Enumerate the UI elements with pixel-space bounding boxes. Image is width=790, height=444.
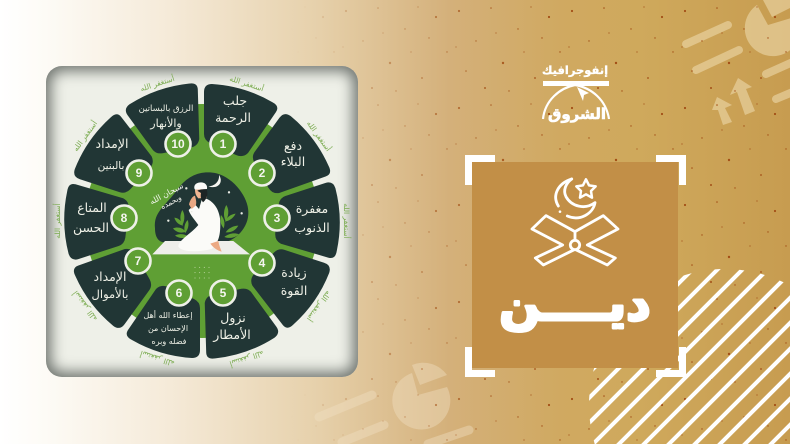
segment labels: مغفرة <box>296 201 328 217</box>
prayer mat <box>152 241 250 254</box>
segment labels: الإحسان من <box>148 324 188 334</box>
green wheel disc <box>85 104 319 338</box>
outer green istighfar labels: أستغفر الله <box>70 289 99 324</box>
outer green istighfar labels: أستغفر الله <box>139 349 176 369</box>
leaves <box>173 205 239 238</box>
logo cursor <box>577 87 589 101</box>
calligraphy: وبحمده <box>159 193 183 211</box>
badge numbers: 2 <box>259 166 266 180</box>
segment labels: المتاع <box>77 200 107 215</box>
stars <box>167 187 243 222</box>
calligraphy <box>148 181 190 215</box>
calligraphy: سبحان الله <box>148 181 185 206</box>
logo bar <box>543 81 609 86</box>
segment labels: البلاء <box>281 154 305 169</box>
segment labels <box>73 93 330 346</box>
outer green istighfar labels: أستغفر الله <box>70 118 99 153</box>
badge numbers: 8 <box>121 211 128 225</box>
outer green istighfar labels: أستغفر الله <box>228 349 265 369</box>
face and hands <box>195 189 207 198</box>
outer green istighfar labels: أستغفر الله <box>139 73 176 93</box>
badge numbers <box>121 137 281 300</box>
badge numbers: 5 <box>220 286 227 300</box>
logo caption: إنفوجرافيك <box>542 63 608 78</box>
decoration: top-right pie and bars <box>686 0 790 125</box>
segment labels: جلب <box>223 93 247 108</box>
segment labels: الإمداد <box>94 269 126 284</box>
segment labels: دفع <box>284 138 302 153</box>
segment labels: الإمداد <box>96 136 128 151</box>
outer green istighfar labels: أستغفر الله <box>305 118 334 153</box>
segment labels: بالبنين <box>98 160 124 172</box>
decoration: bottom pie and bars <box>319 363 469 444</box>
segment labels: والأنهار <box>149 116 182 130</box>
badge numbers: 3 <box>274 211 281 225</box>
segment labels: الرحمة <box>215 110 251 126</box>
background decoration <box>304 0 790 444</box>
outer green istighfar labels: أستغفر الله <box>305 289 334 324</box>
central illustration: praying man <box>148 172 250 278</box>
decoration: speckles <box>290 0 790 444</box>
segment labels: الرزق بالبساتين <box>139 104 193 114</box>
badge numbers: 4 <box>259 256 266 270</box>
outer green istighfar labels: أستغفر الله <box>228 73 265 93</box>
card corner brackets <box>465 155 686 377</box>
outer green istighfar labels <box>52 73 352 369</box>
segment labels: الذنوب <box>294 220 330 236</box>
badge numbers: 6 <box>176 286 183 300</box>
badge numbers: 1 <box>220 137 227 151</box>
dark backdrop <box>155 172 248 242</box>
decoration: diagonal stripes <box>589 269 790 444</box>
logo wordmark: الشروق <box>548 105 606 123</box>
card title: ديــــن <box>499 276 651 332</box>
segment labels: القوة <box>281 283 307 299</box>
beard <box>198 188 207 202</box>
badge numbers: 10 <box>171 137 185 151</box>
segment labels: نزول <box>220 310 246 326</box>
icon: crescent star and open book <box>532 179 618 265</box>
robe <box>178 198 220 251</box>
outer green istighfar labels: أستغفر الله <box>342 203 352 239</box>
foot <box>210 241 222 252</box>
category card <box>472 162 678 368</box>
badge numbers: 7 <box>135 254 142 268</box>
panel: wheel of istighfar benefits <box>46 66 358 377</box>
logo curve <box>543 85 609 119</box>
segment labels: الحسن <box>73 220 109 236</box>
crescent <box>208 175 221 187</box>
segment labels: فضله وبره <box>152 337 187 346</box>
number badges <box>112 132 290 306</box>
segment labels: زيادة <box>281 265 307 281</box>
segment labels: الأمطار <box>212 327 251 343</box>
cap <box>194 182 207 190</box>
segment labels: بالأموال <box>92 287 128 302</box>
dot grid <box>194 267 209 278</box>
badge numbers: 9 <box>136 166 143 180</box>
dark segments <box>48 66 356 376</box>
logo <box>542 63 609 123</box>
outer green istighfar labels: أستغفر الله <box>52 203 62 239</box>
segment labels: إعطاء الله أهل <box>144 310 192 321</box>
